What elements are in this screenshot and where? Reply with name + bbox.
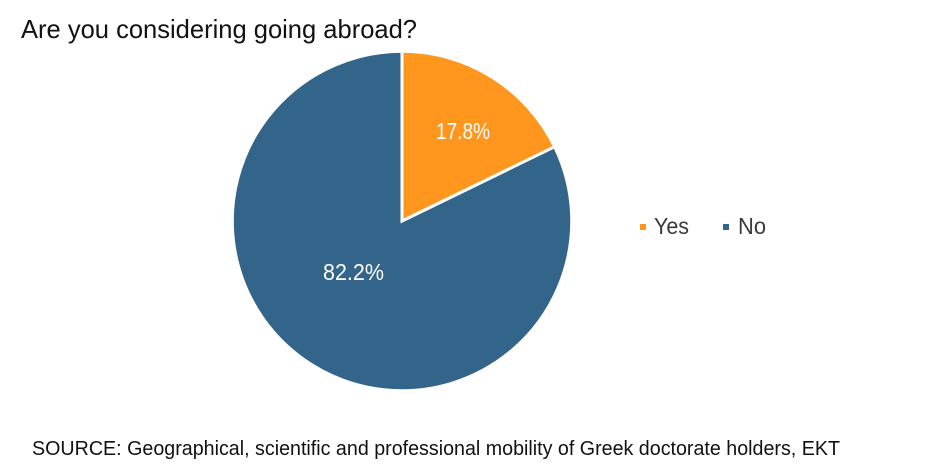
legend xyxy=(640,213,766,239)
legend item: No: No xyxy=(738,213,766,239)
source note: SOURCE: Geographical, scientific and professional mobility of Greek doctorate holders, EKT xyxy=(32,438,840,460)
legend item: Yes: Yes xyxy=(654,213,689,239)
pie chart xyxy=(232,51,572,391)
slice: Yes 17.8% xyxy=(402,51,555,221)
label: 82.2%: 82.2% xyxy=(323,259,384,285)
label: 17.8%: 17.8% xyxy=(436,118,490,144)
slice: No 82.2% xyxy=(232,51,572,391)
title: Are you considering going abroad? xyxy=(21,14,417,44)
